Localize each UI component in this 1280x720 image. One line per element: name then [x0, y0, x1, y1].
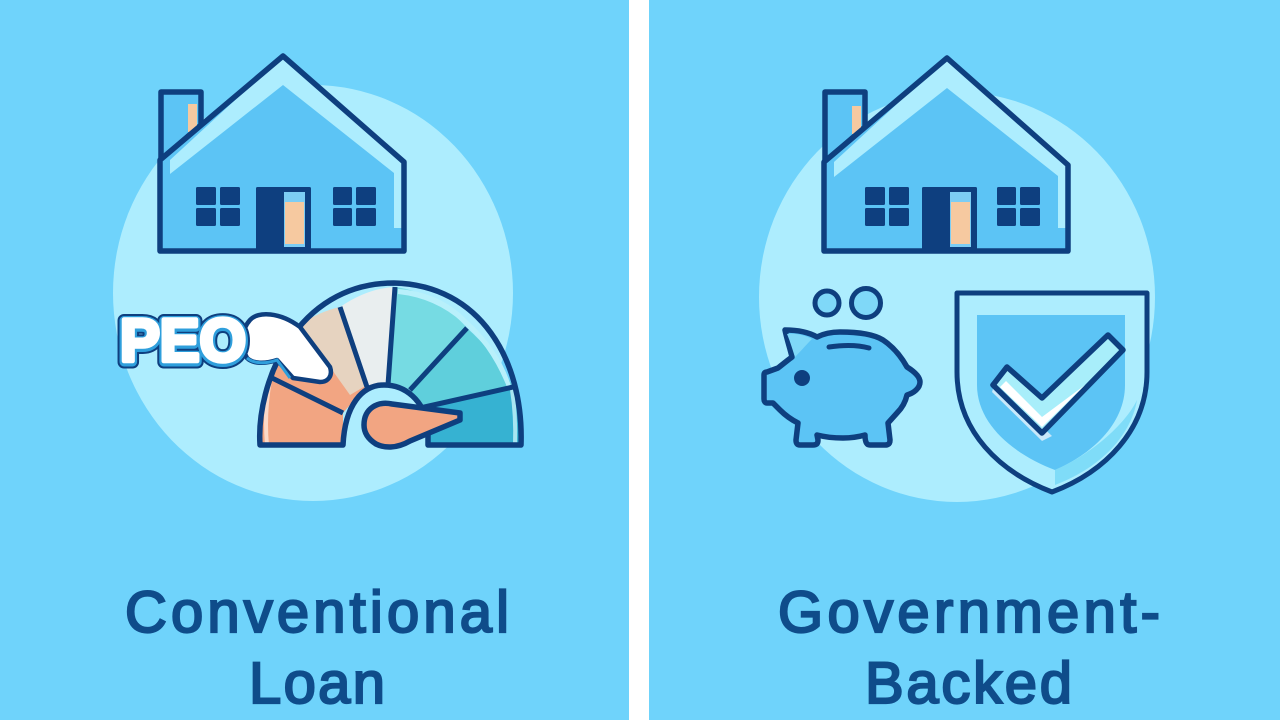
background circle left: [113, 85, 513, 501]
label: gauge badge text: PEO: [120, 307, 246, 374]
title: government-backed: Government-: [778, 580, 1160, 645]
title: conventional loan: [125, 580, 509, 716]
title: government-backed: [778, 580, 1160, 716]
background circle right: [759, 92, 1155, 502]
icon: piggy bank: [764, 330, 920, 445]
panel: government-backed: [649, 0, 1280, 720]
icon: coins: [815, 288, 880, 318]
panel: conventional loan: [0, 0, 629, 720]
icon: house left: [160, 56, 404, 251]
icon: shield with check: [957, 293, 1147, 492]
title: conventional loan: Conventional: [125, 580, 509, 645]
title: conventional loan: Loan: [249, 651, 385, 716]
label: gauge badge text: PEO: [120, 308, 246, 375]
icon: credit score gauge: [260, 283, 521, 447]
label: gauge badge text: PEO: [120, 308, 246, 375]
title: government-backed: Backed: [865, 651, 1072, 716]
icon: house right: [824, 58, 1068, 251]
icon: pointing finger on gauge: [242, 314, 331, 382]
